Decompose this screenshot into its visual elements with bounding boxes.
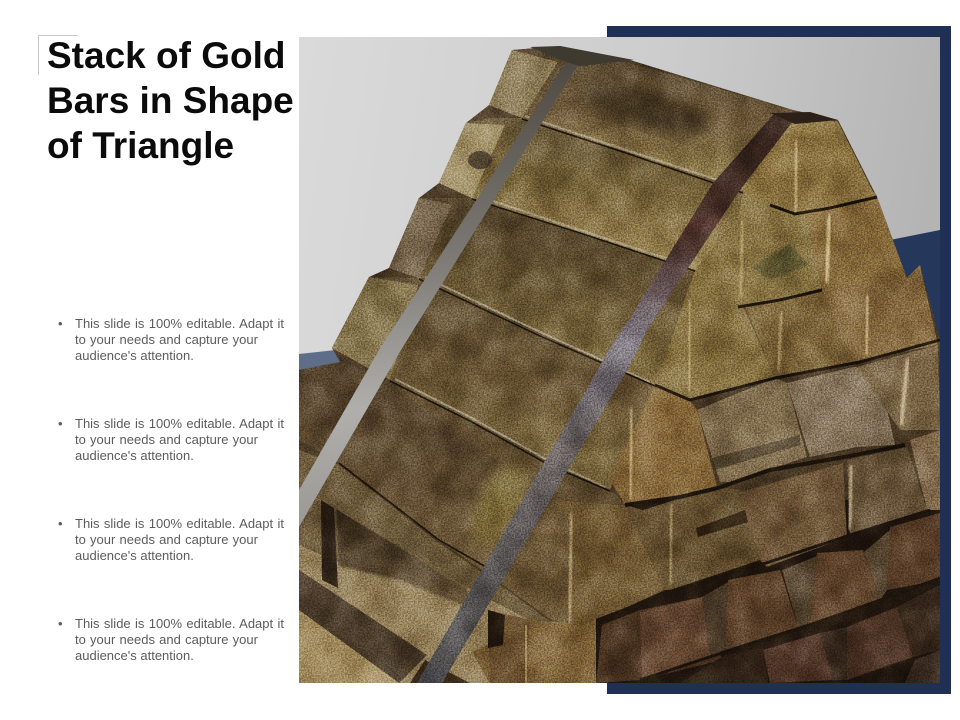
stack grain texture (299, 37, 940, 683)
wall background (299, 37, 940, 354)
bullet text 2: • (58, 416, 63, 431)
blue wall band left (299, 350, 340, 370)
bar 3 left end (389, 198, 452, 278)
dark bottom rows (596, 500, 940, 683)
bar 2 end blocks (695, 190, 907, 307)
bullet text 2 (58, 416, 284, 463)
bar 3 end blocks (655, 265, 938, 400)
bar 5 lower strip (299, 450, 552, 623)
light edges above bar cracks (395, 116, 730, 487)
bullet text 3 (58, 516, 284, 563)
bullet text 3: to your needs and capture your (75, 532, 258, 547)
bar 5 long face (299, 362, 627, 590)
title: Bars in Shape (47, 80, 294, 121)
bar 5 end blocks (510, 430, 940, 625)
photo: stack of gold bars (299, 37, 940, 683)
lower base gold block (472, 610, 596, 683)
bullet text 4: to your needs and capture your (75, 632, 258, 647)
reflective base panel (299, 487, 558, 683)
bar 1 top dark patch (577, 70, 713, 146)
bullet text 1: This slide is 100% editable. Adapt it (75, 316, 284, 331)
bar 2 long face (439, 118, 743, 270)
bullet text 4: • (58, 616, 63, 631)
bar 5 olive glow (468, 459, 532, 549)
bullet text 4: audience's attention. (75, 648, 194, 663)
bar 4 long face (332, 277, 655, 490)
stack silhouette (299, 46, 940, 683)
bar 1 left end (489, 50, 558, 118)
strap top piece left (530, 46, 634, 66)
title: of Triangle (47, 125, 234, 166)
bullet text 1: audience's attention. (75, 348, 194, 363)
navy frame behind photo (607, 26, 951, 694)
bar 1 long face (489, 48, 793, 190)
bullet text 2: This slide is 100% editable. Adapt it (75, 416, 284, 431)
stack blotch texture (299, 37, 940, 683)
bar 4 end blocks (610, 345, 940, 505)
bullet text 1: to your needs and capture your (75, 332, 258, 347)
bullet text 3: This slide is 100% editable. Adapt it (75, 516, 284, 531)
bullet text 3: • (58, 516, 63, 531)
speckled strap right (417, 112, 800, 683)
bullet text 1 (58, 316, 284, 363)
silver strap left (299, 62, 579, 527)
bar 3 long face (389, 198, 695, 385)
bar 5 top ledge (390, 380, 627, 505)
blue wall band right (892, 230, 940, 340)
title (47, 35, 294, 166)
bar 4 left end (332, 277, 418, 380)
strap top piece right (770, 112, 838, 124)
bullet text 3: audience's attention. (75, 548, 194, 563)
bullet text 4 (58, 616, 284, 663)
bullet text 2: to your needs and capture your (75, 432, 258, 447)
title: Stack of Gold (47, 35, 285, 76)
bar 2 left end (439, 123, 505, 198)
bullet text 4: This slide is 100% editable. Adapt it (75, 616, 284, 631)
corner accent lines (38, 35, 78, 75)
bullet text 2: audience's attention. (75, 448, 194, 463)
bar 2 left end dark spot (468, 151, 492, 169)
bar 1 end block (743, 112, 877, 214)
bullet text 1: • (58, 316, 63, 331)
gaps between bars (339, 119, 940, 680)
